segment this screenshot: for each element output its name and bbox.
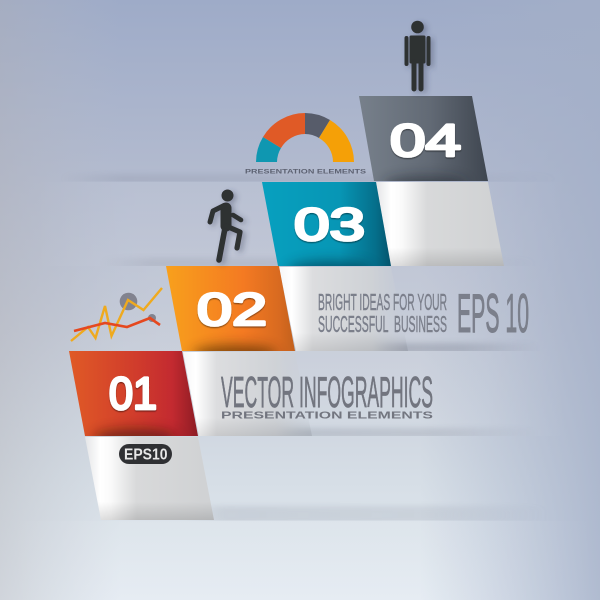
panel: white block under step 02 [183, 352, 312, 436]
panel: white block under step 04 [376, 182, 504, 266]
chart: line chart icon [71, 288, 162, 341]
panel: white block under step 03 [279, 267, 408, 351]
panel: step 03 [262, 182, 391, 266]
number 04: 04 [390, 115, 461, 166]
icon: walking person [210, 190, 241, 260]
caption: presentation elements: PRESENTATION ELEMENTS [245, 168, 367, 176]
panel: step 02 [166, 266, 295, 351]
number 01: 01 [109, 368, 157, 419]
number 03: 03 [294, 199, 365, 250]
subheading: presentation elements: PRESENTATION ELEMENTS [221, 410, 434, 422]
panel: step 01 [69, 351, 198, 436]
icon: standing person [406, 21, 428, 89]
panel: step 04 [359, 96, 488, 181]
number 02: 02 [197, 284, 267, 335]
text: SUCCESSFUL BUSINESS [318, 311, 447, 337]
badge: EPS10: EPS10 [124, 446, 168, 464]
panel: white block under step 01 [85, 437, 214, 520]
chart: presentation semi-donut [256, 113, 354, 162]
